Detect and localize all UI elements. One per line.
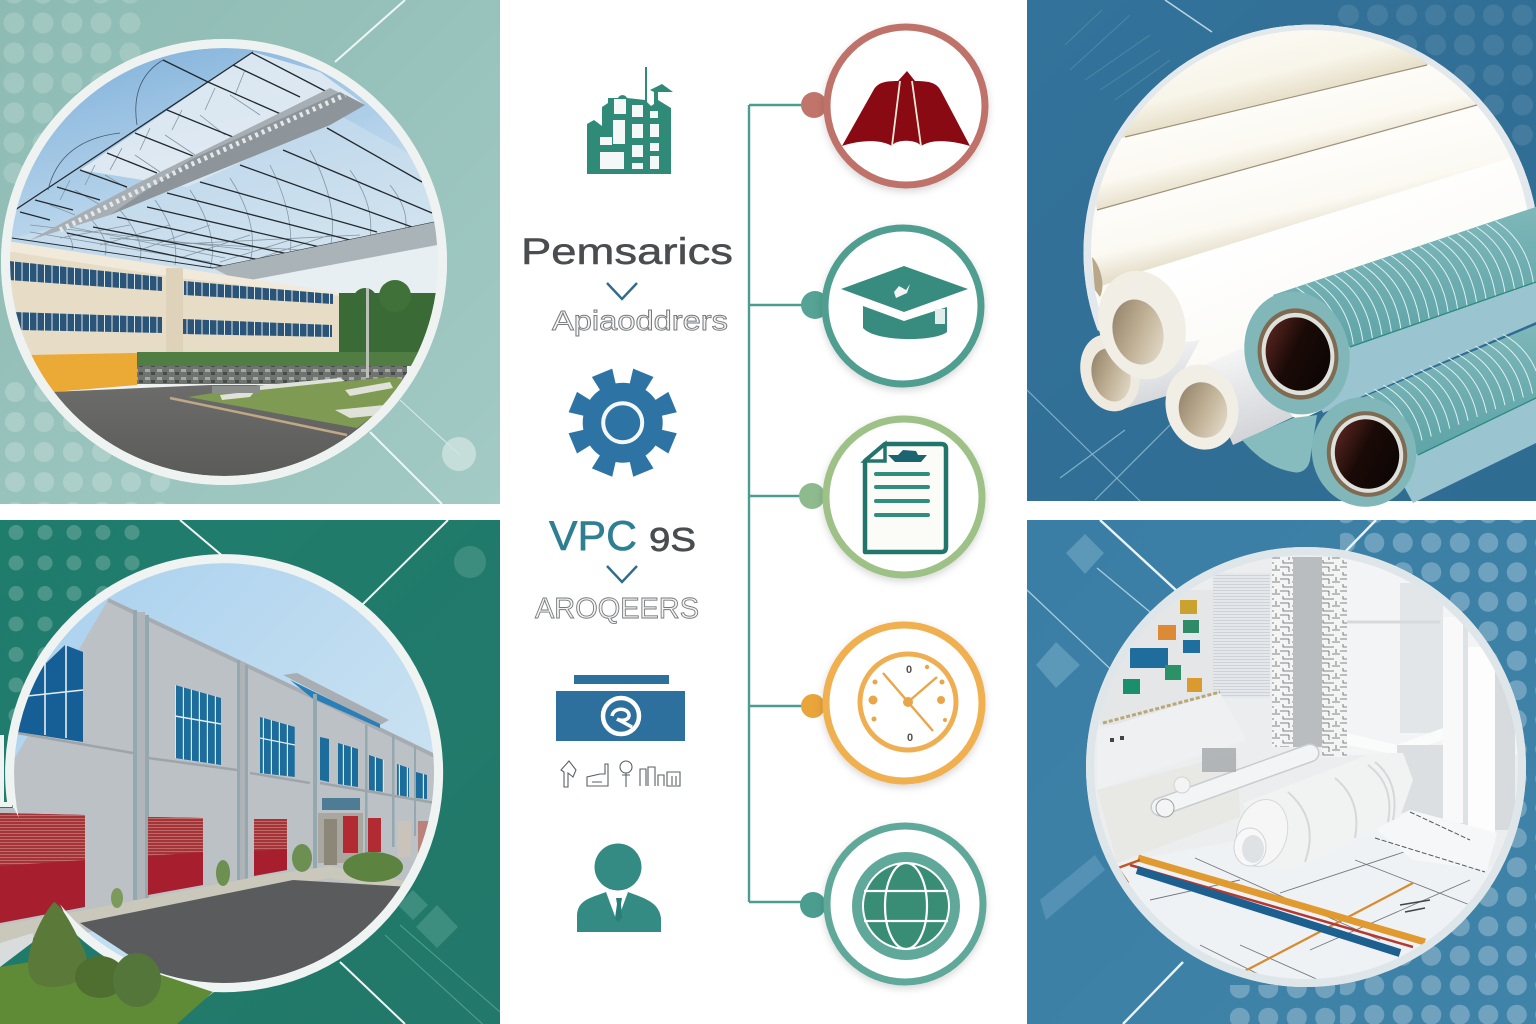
ring stub at left edge [0, 735, 12, 807]
panel: bottom-right installation room [1027, 520, 1536, 1024]
ring arc [10, 559, 439, 988]
title: VPC 9S: VPC [549, 512, 637, 559]
icon: graduation cap [841, 266, 968, 339]
flap: teal sheet [1242, 415, 1317, 472]
icon: red roof [842, 71, 970, 146]
roll: main white end [1086, 261, 1198, 389]
circle: document icon [799, 419, 982, 575]
lawn and shrubs [0, 902, 213, 1024]
photo: white room with pipes [1085, 545, 1532, 1000]
icon: globe [852, 852, 960, 960]
icon: chevron [607, 566, 637, 582]
icon: document [865, 444, 946, 552]
circle: roof icon [801, 27, 985, 185]
circle: clock icon [801, 625, 982, 781]
icon: blue search banner [556, 675, 685, 741]
icon: person [577, 844, 661, 932]
circle: graduation cap icon [801, 228, 981, 384]
photo: steel roof over factory [0, 39, 450, 490]
icon: clock: 0 [907, 732, 913, 744]
photo: grey factory building [0, 559, 439, 1024]
icon: chevron [607, 283, 637, 299]
photo: white and teal pipe rolls [1072, 20, 1536, 519]
title: VPC 9S [549, 512, 696, 559]
pipe: teal upper [1231, 207, 1536, 426]
connector lines [749, 105, 805, 902]
title: Pemsarics: Pemsarics [521, 231, 733, 272]
center icons and labels [521, 67, 733, 932]
label: Apiaoddrers: Apiaoddrers [552, 305, 728, 336]
icon: green building [587, 67, 673, 174]
panel: top-left roof structure [0, 0, 500, 504]
roll: small white at back [1072, 328, 1200, 418]
icon: clock: 0 [906, 664, 912, 676]
label: Aroqeers: AROQEERS [535, 593, 699, 625]
title: VPC 9S: 9S [649, 521, 696, 558]
icon: blue gear [569, 369, 677, 477]
panel: top-right pipes [1027, 0, 1536, 519]
panel: bottom-left factory [0, 520, 500, 1024]
circle: globe icon [800, 826, 983, 982]
roll: lower white [1156, 348, 1293, 458]
icons: small outline row [561, 761, 680, 787]
pipe: teal lower [1300, 325, 1536, 519]
icon: clock [860, 654, 956, 750]
